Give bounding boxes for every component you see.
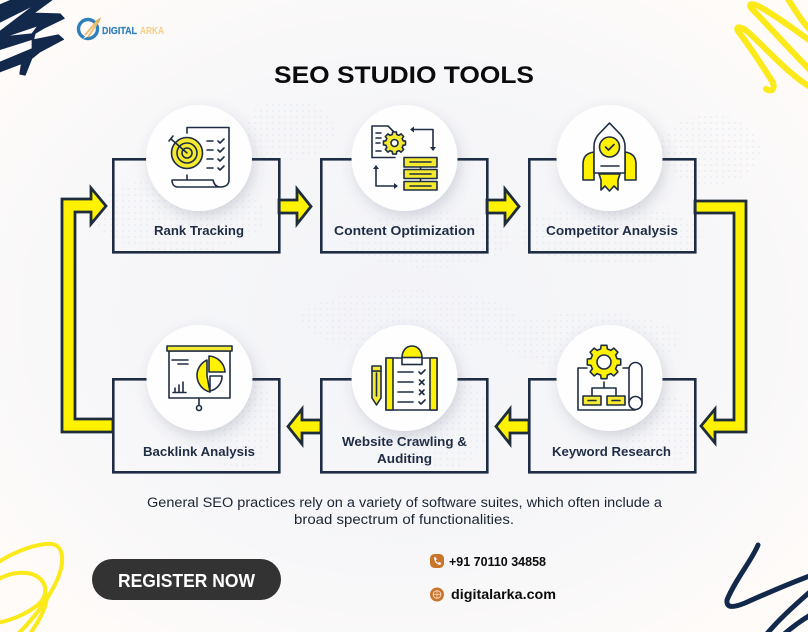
panel: backlink analysis	[113, 325, 279, 472]
title: SEO STUDIO TOOLS	[274, 62, 534, 89]
label: keyword research: Keyword Research	[552, 444, 671, 459]
arrow: content optimization to competitor analysis	[487, 189, 519, 224]
logo: Digital Arka: ARKA	[140, 25, 164, 37]
panel: website crawling and auditing	[321, 325, 487, 472]
label: rank tracking: Rank Tracking	[154, 223, 244, 238]
contact: website: digitalarka.com	[451, 586, 556, 602]
scribble: yellow bottom left	[0, 544, 62, 632]
panel: content optimization	[321, 105, 487, 252]
label: content optimization: Content Optimization	[334, 223, 475, 238]
panel: competitor analysis	[529, 105, 695, 252]
description text: broad spectrum of functionalities.	[294, 512, 514, 527]
icon: blueprint gear	[578, 345, 642, 410]
label: website crawling and auditing	[342, 434, 467, 466]
arrow: competitor analysis to keyword research	[695, 201, 746, 443]
button: register now: REGISTER NOW	[118, 570, 256, 591]
description text: General SEO practices rely on a variety of software suites, which often include a	[147, 495, 663, 510]
panel: rank tracking	[113, 105, 279, 252]
arrow: website crawling to backlink analysis	[288, 409, 321, 444]
description text	[147, 495, 663, 527]
arrow: keyword research to website crawling	[496, 409, 529, 444]
scribble: navy top left	[0, 0, 64, 75]
logo: Digital Arka: DIGITAL	[102, 25, 137, 37]
arrow: backlink analysis to rank tracking	[62, 188, 113, 432]
contact: phone: +91 70110 34858	[449, 554, 546, 569]
icon: presentation board with pie chart	[167, 346, 232, 410]
logo: Digital Arka	[78, 17, 164, 39]
label: competitor analysis: Competitor Analysis	[546, 223, 678, 238]
panel: keyword research	[529, 325, 695, 472]
icon: clipboard and pencil	[372, 346, 437, 410]
icon: document gear and flow	[372, 126, 437, 190]
icon: rocket	[583, 123, 636, 191]
icon: target and checklist	[169, 128, 229, 187]
label: website crawling and auditing: Auditing	[377, 451, 432, 466]
label: website crawling and auditing: Website Crawling &	[342, 434, 467, 449]
label: backlink analysis: Backlink Analysis	[143, 444, 255, 459]
button: register now	[92, 559, 281, 600]
scribble: yellow top right	[737, 0, 808, 90]
scribble: navy bottom right	[727, 545, 808, 632]
arrow: rank tracking to content optimization	[279, 189, 311, 224]
